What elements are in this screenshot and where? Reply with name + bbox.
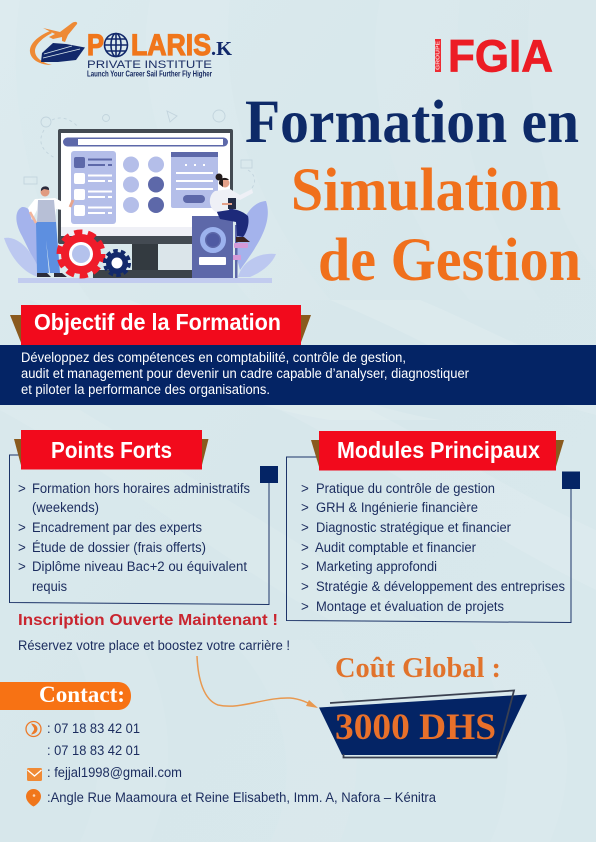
list: modules: > xyxy=(301,579,309,594)
heading: cout global: Coût Global : xyxy=(335,653,501,684)
gear: red xyxy=(60,232,102,276)
circles xyxy=(123,156,164,213)
title: Formation en xyxy=(245,89,579,156)
logo wordmark: LARIS xyxy=(131,29,211,62)
leaves xyxy=(4,201,276,277)
arrow: to price xyxy=(197,656,318,708)
icon: globe xyxy=(104,34,128,56)
title xyxy=(245,89,581,294)
list: points forts: > xyxy=(18,540,26,555)
list: points forts: > xyxy=(18,520,26,535)
decorative square xyxy=(260,466,278,483)
title: Simulation xyxy=(291,157,561,224)
list: modules: > xyxy=(301,540,309,555)
logo: Polaris.K xyxy=(30,22,232,79)
panel: objective text xyxy=(0,345,596,405)
logo: IFGIA: GROUPE xyxy=(436,40,442,70)
list: modules: > xyxy=(301,599,309,614)
list: points forts: > xyxy=(18,481,26,496)
logo tagline: Launch Your Career Sail Further Fly Higher xyxy=(87,68,212,78)
list: points forts: Encadrement par des experts xyxy=(32,520,202,535)
woman xyxy=(210,174,253,242)
list: points forts xyxy=(18,481,250,594)
list: points forts: (weekends) xyxy=(32,500,99,515)
icon: mail xyxy=(27,768,42,781)
ribbon: points forts heading xyxy=(14,430,208,470)
icon: location pin xyxy=(26,789,41,806)
text: address: :Angle Rue Maamoura et Reine Elisabeth, Imm. A, Nafora – Kénitra xyxy=(47,790,437,805)
call to action: inscription: Réservez votre place et boostez votre carrière ! xyxy=(18,638,290,653)
contact details xyxy=(26,721,437,806)
list: modules: > xyxy=(301,559,309,574)
list: modules: > xyxy=(301,520,309,535)
floor xyxy=(18,278,272,283)
icon: plane and ship xyxy=(30,22,85,65)
logo wordmark: .K xyxy=(211,38,232,60)
list: points forts: requis xyxy=(32,579,67,594)
text: phone 1: : 07 18 83 42 01 xyxy=(47,721,140,736)
ribbon: objective heading xyxy=(10,305,311,345)
logo wordmark xyxy=(87,29,232,62)
logo wordmark: P xyxy=(87,29,104,62)
price banner: 3000 DHS xyxy=(335,707,496,748)
section: objective xyxy=(0,305,596,405)
logo: IFGIA: FGIA xyxy=(448,30,553,82)
gear: navy xyxy=(105,251,129,275)
list: points forts: Diplôme niveau Bac+2 ou équivalent xyxy=(32,559,247,574)
monitor xyxy=(58,129,233,278)
ribbon: modules heading xyxy=(311,431,564,470)
contact pill xyxy=(0,682,131,710)
icon: phone xyxy=(26,722,41,736)
call to action: inscription xyxy=(18,612,290,653)
list: points forts: Étude de dossier (frais offerts) xyxy=(32,540,206,555)
search bar xyxy=(63,138,228,146)
panel: objective text: et piloter la performance des organisations. xyxy=(21,382,270,397)
document with chart xyxy=(192,216,248,278)
price banner xyxy=(319,690,527,758)
list: modules: > xyxy=(301,481,309,496)
ribbon: modules heading: Modules Principaux xyxy=(337,437,540,463)
logo subtitle: PRIVATE INSTITUTE xyxy=(87,59,212,71)
faint background icons xyxy=(24,110,255,188)
title: de Gestion xyxy=(318,227,581,294)
list: modules: Stratégie & développement des entreprises xyxy=(316,579,565,594)
list: points forts: Formation hors horaires administratifs xyxy=(32,481,250,496)
panel: objective text: Développez des compétences en comptabilité, contrôle de gestion, xyxy=(21,350,406,365)
list: modules: Montage et évaluation de projets xyxy=(316,599,504,614)
right card xyxy=(171,152,218,208)
list: modules: Audit comptable et financier xyxy=(315,540,477,555)
list: modules: Diagnostic stratégique et financier xyxy=(316,520,512,535)
call to action: inscription: Inscription Ouverte Maintenant ! xyxy=(18,612,278,629)
contact pill: Contact: xyxy=(39,682,125,707)
text: phone 2: : 07 18 83 42 01 xyxy=(47,743,140,758)
ribbon: points forts heading: Points Forts xyxy=(51,437,172,463)
left panel xyxy=(71,151,116,224)
ribbon: objective heading: Objectif de la Formation xyxy=(34,309,281,335)
list: modules: GRH & Ingénierie financière xyxy=(316,500,478,515)
list: modules: Marketing approfondi xyxy=(316,559,437,574)
list: modules: Pratique du contrôle de gestion xyxy=(316,481,495,496)
list: modules xyxy=(301,481,565,614)
decorative square xyxy=(562,472,580,489)
panel: objective text: audit et management pour devenir un cadre capable d’analyser, diagnostiquer xyxy=(21,366,470,381)
list: points forts: > xyxy=(18,559,26,574)
panel: modules principaux xyxy=(286,431,580,622)
illustration: dashboard with people xyxy=(4,110,276,283)
list: modules: > xyxy=(301,500,309,515)
text: email: : fejjal1998@gmail.com xyxy=(47,765,182,780)
panel: points forts xyxy=(10,430,278,604)
man xyxy=(28,186,73,277)
